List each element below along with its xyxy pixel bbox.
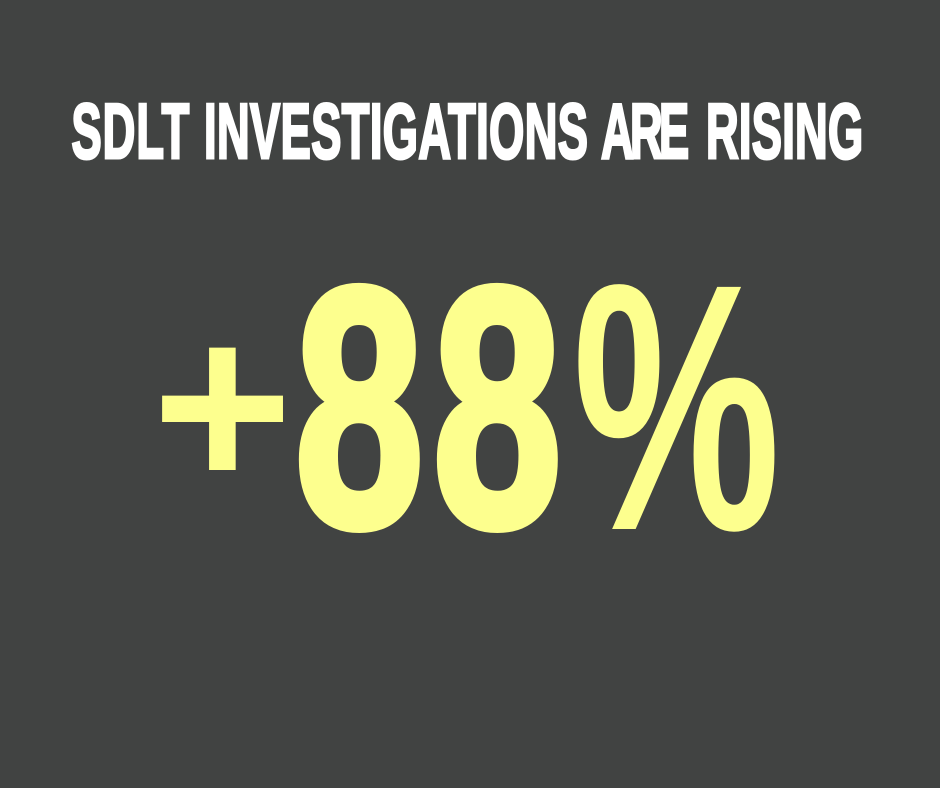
title xyxy=(72,87,863,175)
title: ARE xyxy=(601,87,689,175)
plus sign: + xyxy=(152,272,293,541)
title: SDLT xyxy=(72,87,189,175)
title: INVESTIGATIONS xyxy=(204,87,588,175)
title: RISING xyxy=(706,87,863,175)
digits 88: 88 xyxy=(295,217,562,597)
big statistic: +88% xyxy=(152,210,781,604)
percent sign: % xyxy=(573,210,781,604)
